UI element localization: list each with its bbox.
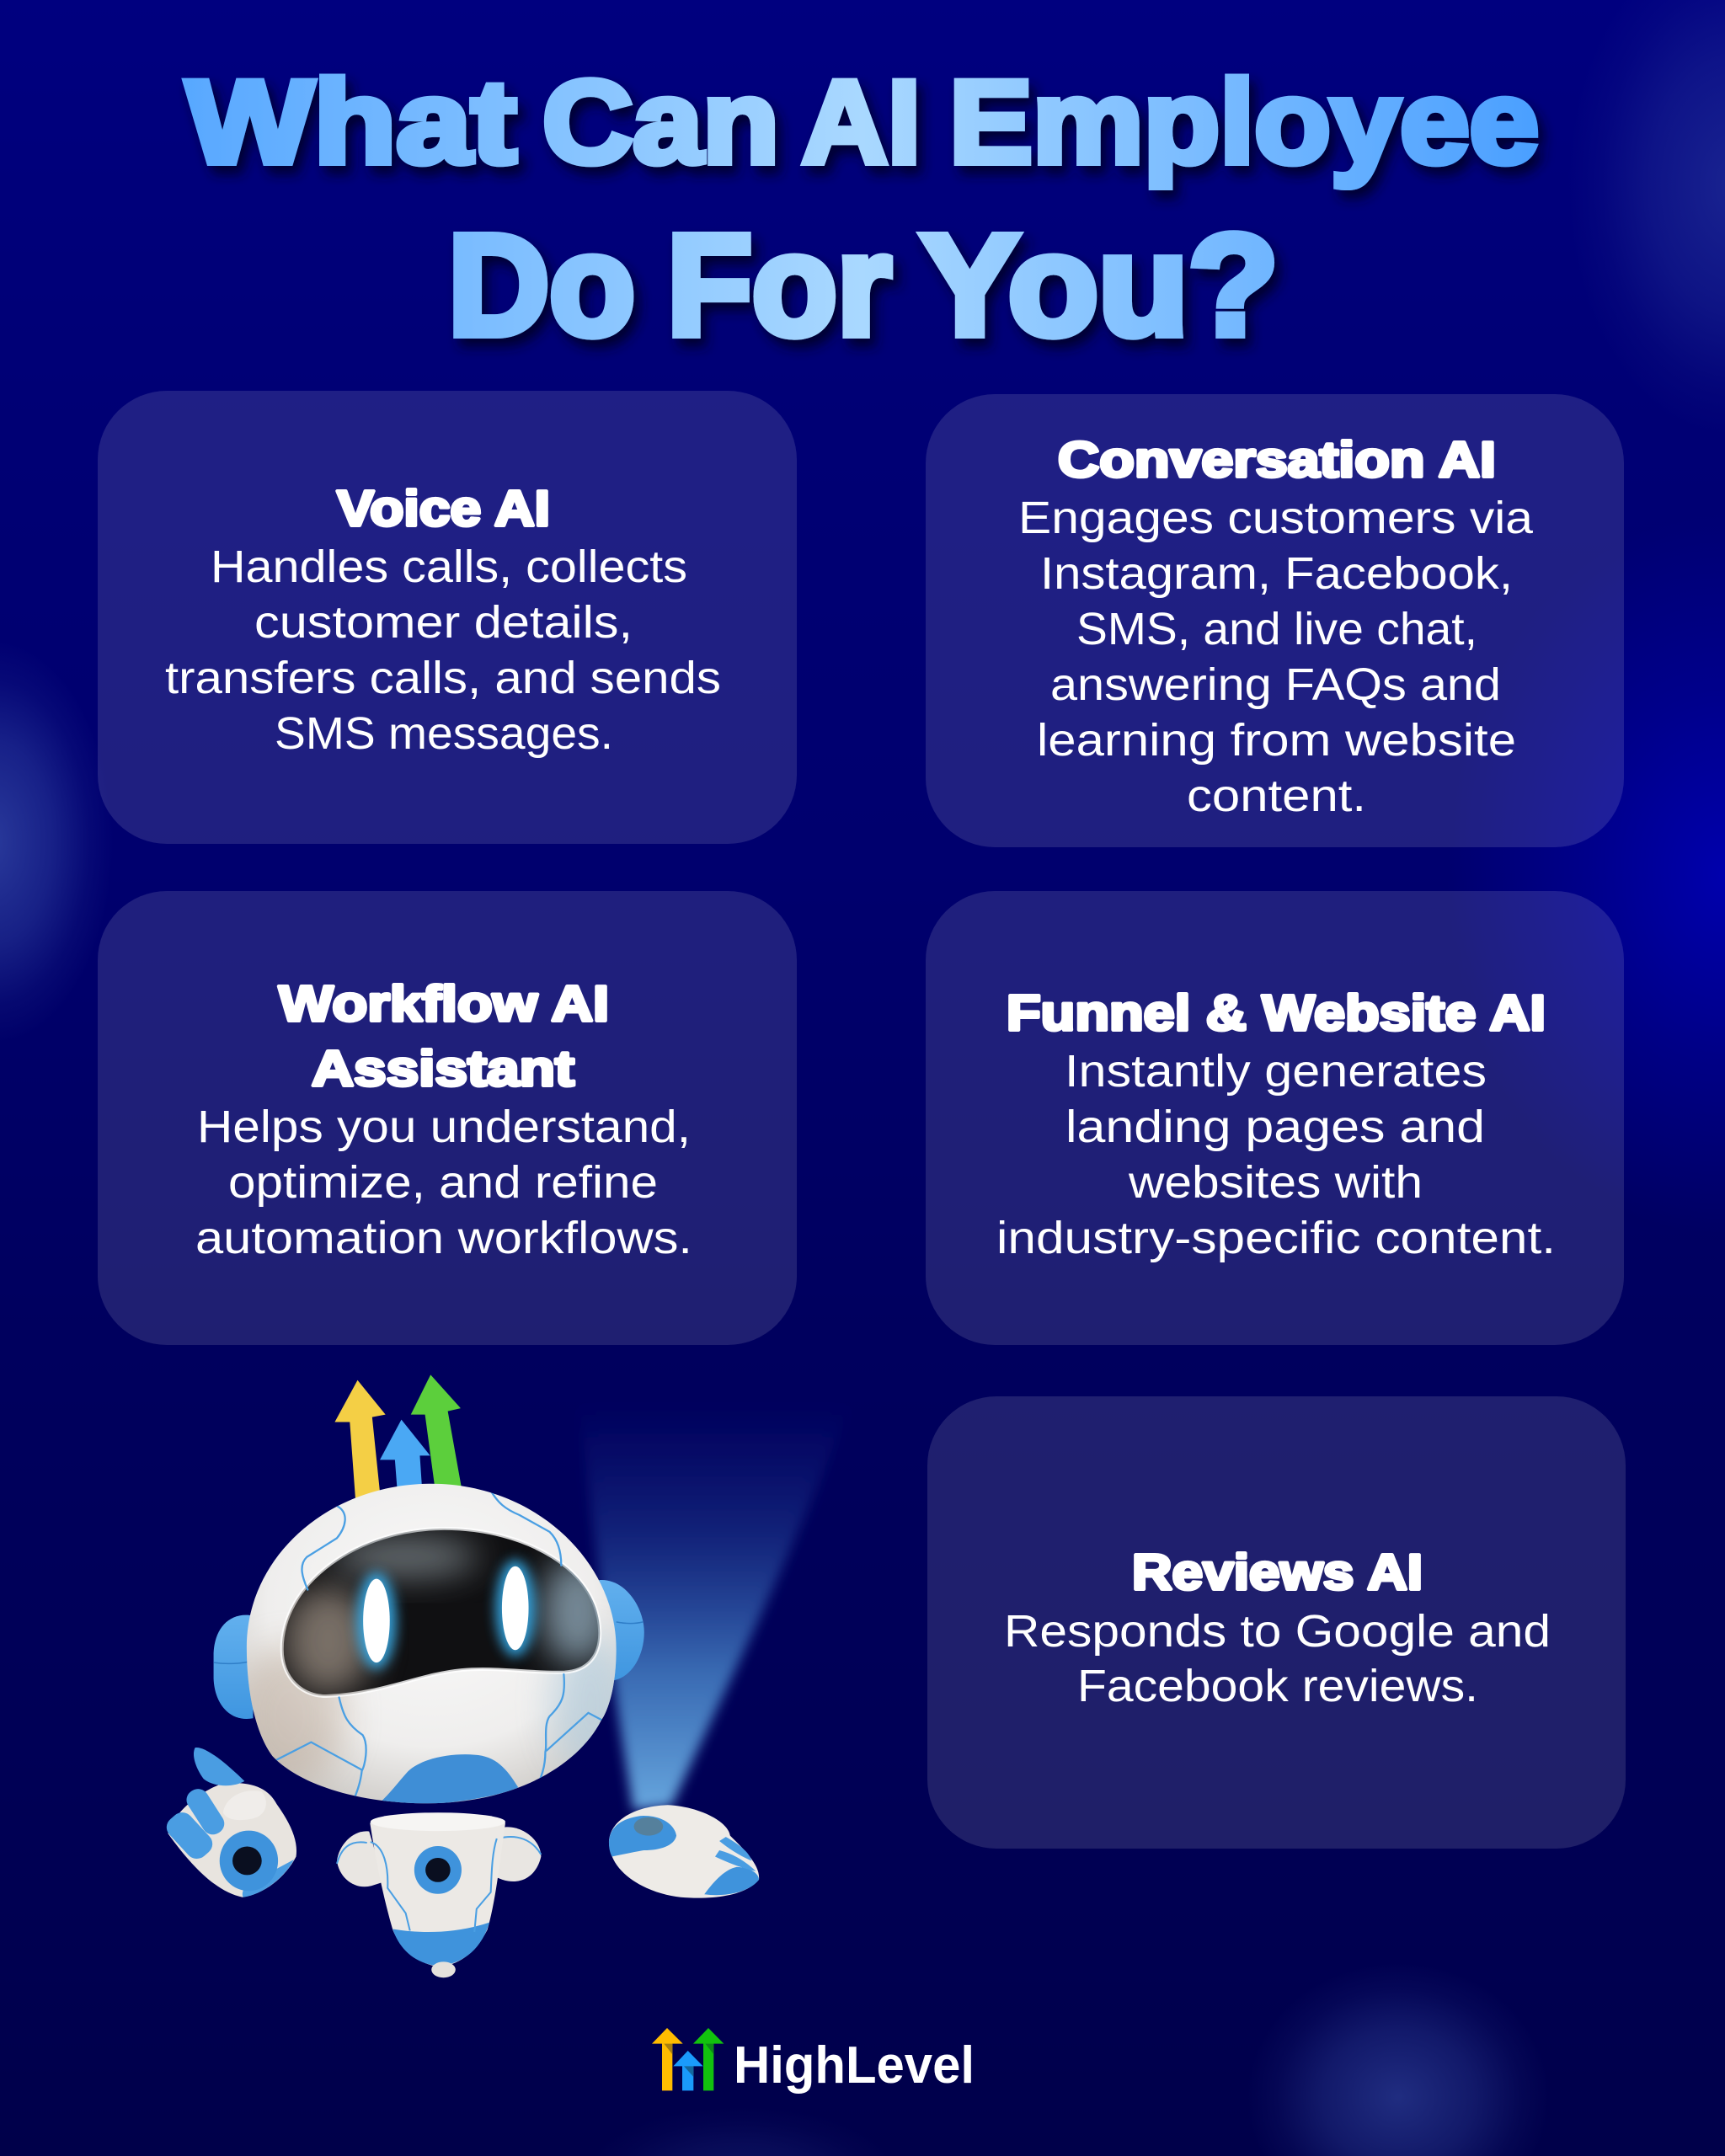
light beam [574,1348,866,1811]
body: Workflow AI Assistant: Helps you understand, [197,1102,691,1152]
robot right hand [609,1805,759,1898]
illustration: robot mascot [167,1374,825,1977]
heading: Reviews AI: Reviews AI [1132,1545,1423,1600]
body: Voice AI: SMS messages. [275,708,613,759]
heading: Workflow AI Assistant: Workflow AI [279,976,609,1032]
robot left hand [162,1748,296,1897]
heading: Funnel & Website AI: Funnel & Website AI [1007,985,1546,1041]
body: Voice AI [165,542,721,759]
body: Conversation AI: Instagram, Facebook, [1040,548,1513,599]
circuit lines on head [276,1492,602,1802]
body: Conversation AI: answering FAQs and [1050,659,1501,710]
title line 2: Do [448,205,635,366]
body: Funnel & Website AI [996,1046,1556,1263]
chin patch [382,1754,519,1804]
body: Funnel & Website AI: Instantly generates [1065,1046,1487,1097]
title line 2 [448,205,1279,366]
title [186,56,1539,366]
heading: Conversation AI: Conversation AI [1058,432,1496,488]
wordmark: HighLevel [734,2036,975,2095]
title line 1 [186,56,1539,188]
logo: HighLevel [652,2028,975,2095]
heading: Workflow AI Assistant [279,976,609,1097]
panel: Workflow AI Assistant [98,891,797,1345]
heading: Workflow AI Assistant: Assistant [312,1041,574,1097]
body: Workflow AI Assistant: optimize, and refine [228,1157,658,1208]
body: Voice AI: Handles calls, collects [211,542,687,592]
body: Voice AI: customer details, [254,597,633,648]
body: Conversation AI [1018,493,1534,821]
body: Conversation AI: SMS, and live chat, [1076,604,1477,654]
body: Conversation AI: content. [1187,771,1366,821]
title line 1: AI [802,56,921,188]
icon: three coloured arrows [652,2028,724,2090]
robot ears [214,1580,644,1719]
panel: Conversation AI [926,394,1624,847]
body: Funnel & Website AI: websites with [1128,1157,1423,1208]
visor [282,1529,614,1696]
body: Funnel & Website AI: landing pages and [1065,1102,1485,1152]
title line 1: What [186,56,516,188]
title line 2: You? [921,205,1279,366]
title line 1: Can [542,56,779,188]
icon: growth arrows on robot head [334,1374,462,1498]
panel: Voice AI [98,391,797,844]
panel: Funnel & Website AI [926,891,1624,1345]
body: Reviews AI: Responds to Google and [1004,1606,1551,1657]
body: Voice AI: transfers calls, and sends [165,653,721,703]
body: Funnel & Website AI: industry-specific content. [996,1213,1556,1263]
body: Reviews AI [1004,1606,1551,1711]
robot head [234,1484,629,1808]
title line 1: Employee [949,56,1539,188]
body: Workflow AI Assistant [195,1102,692,1263]
body: Workflow AI Assistant: automation workflows. [195,1213,692,1263]
robot torso [337,1812,541,1977]
title line 2: For [667,205,891,366]
body: Conversation AI: Engages customers via [1018,493,1534,543]
panel: Reviews AI [927,1396,1626,1849]
robot eyes [356,1560,535,1669]
body: Conversation AI: learning from website [1037,715,1516,766]
heading: Voice AI: Voice AI [337,481,550,536]
body: Reviews AI: Facebook reviews. [1077,1661,1478,1711]
